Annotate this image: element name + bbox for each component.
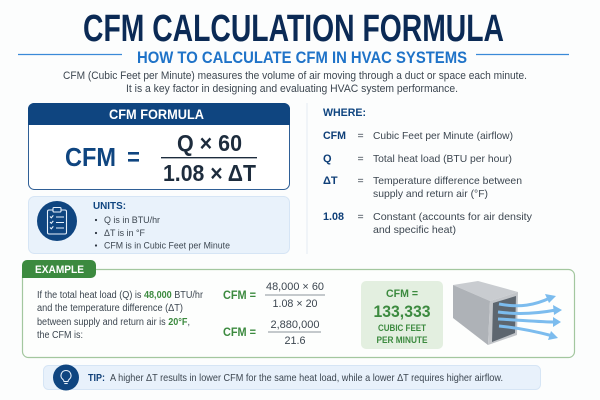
panel: tip [44, 364, 540, 390]
result box: CUBIC FEET [378, 323, 426, 334]
units list: Q is in BTU/hr [104, 215, 160, 226]
tip text: A higher ΔT results in lower CFM for the same heat load, while a lower ΔT requires higher airflow. [110, 372, 503, 384]
definition: CFM: CFM [323, 130, 346, 142]
icon: clipboard checklist [37, 201, 77, 241]
where heading: WHERE: [323, 107, 366, 119]
formula left side: CFM [65, 142, 116, 172]
definition: delta T: supply and return air (°F) [373, 188, 488, 200]
definition: delta T: Temperature difference between [373, 175, 522, 187]
definition: CFM: = [358, 130, 364, 142]
definition: constant: Constant (accounts for air density [373, 211, 533, 223]
definition: delta T: ΔT [323, 175, 338, 187]
example description [37, 290, 204, 341]
units heading: UNITS: [93, 200, 126, 212]
panel: example [22, 260, 574, 358]
definition: Q: = [358, 153, 364, 165]
calculation step 2: 21.6 [284, 335, 306, 347]
definition: Q: Q [323, 153, 332, 165]
example description: If the total heat load (Q) is 48,000 BTU/hr [37, 290, 204, 301]
icon: duct with airflow arrows [453, 281, 562, 345]
panel: units [28, 196, 290, 254]
example tab: EXAMPLE [35, 264, 84, 276]
header [18, 8, 569, 95]
definition: Q: Total heat load (BTU per hour) [373, 153, 512, 165]
formula fraction [161, 130, 257, 186]
result box [361, 281, 443, 349]
calculation step 2 [223, 319, 321, 347]
definition: delta T: = [358, 175, 364, 187]
formula heading: CFM FORMULA [109, 107, 204, 122]
definition: constant: 1.08 [323, 211, 344, 223]
calculation step 2: 2,880,000 [270, 319, 320, 331]
intro text: CFM (Cubic Feet per Minute) measures the volume of air moving through a duct or space each minute. [63, 70, 527, 82]
definition: CFM: Cubic Feet per Minute (airflow) [373, 130, 513, 142]
units list: ΔT is in °F [104, 228, 145, 239]
formula fraction: 1.08 × ΔT [163, 160, 256, 186]
icon: light bulb [53, 364, 79, 390]
example description: and the temperature difference (ΔT) [37, 303, 183, 314]
panel: where definitions [307, 103, 533, 254]
units list: CFM is in Cubic Feet per Minute [104, 240, 230, 252]
example tab [22, 260, 96, 278]
definition: constant [323, 211, 533, 236]
units list [95, 215, 230, 252]
calculation step 1: CFM = [223, 288, 256, 302]
calculation step 1 [223, 281, 325, 310]
tip text: TIP: [88, 372, 105, 384]
intro text [63, 70, 527, 95]
formula fraction: Q × 60 [177, 130, 242, 156]
definition: constant: and specific heat) [373, 224, 456, 236]
example description: between supply and return air is 20°F, [37, 317, 190, 328]
result box: PER MINUTE [376, 335, 428, 346]
example description: the CFM is: [37, 330, 83, 341]
panel: CFM formula [28, 103, 290, 190]
calculation step 1: 48,000 × 60 [266, 281, 324, 293]
definition: constant: = [358, 211, 364, 223]
subtitle: HOW TO CALCULATE CFM IN HVAC SYSTEMS [137, 48, 467, 67]
calculation step 1: 1.08 × 20 [272, 298, 318, 310]
result box: CFM = [386, 288, 418, 300]
definition: delta T [323, 175, 522, 200]
intro text: It is a key factor in designing and evaluating HVAC system performance. [126, 83, 458, 95]
result box: 133,333 [374, 302, 430, 321]
calculation step 2: CFM = [223, 325, 256, 339]
